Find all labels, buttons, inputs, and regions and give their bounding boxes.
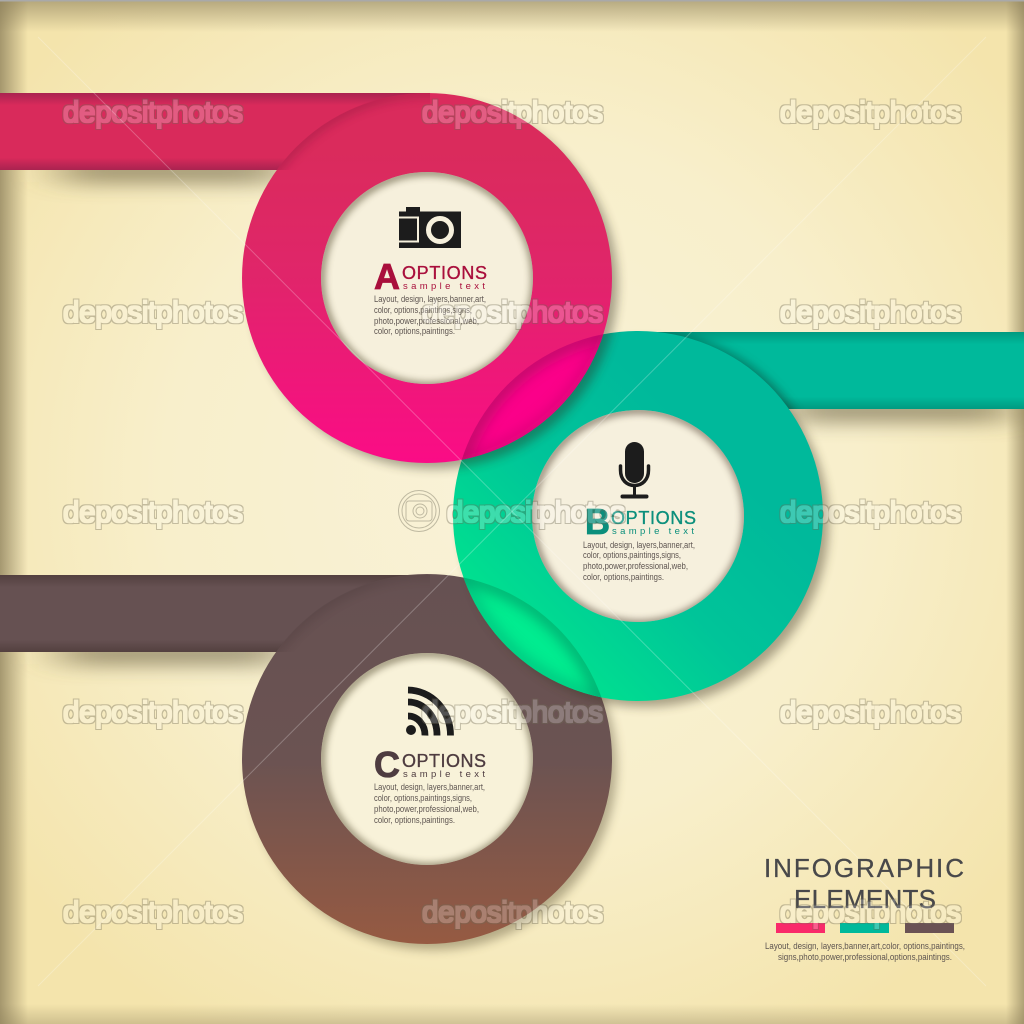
ring edge shading A [277, 93, 430, 170]
icon: watermark camera logo [398, 490, 440, 532]
heading B: sample text [612, 526, 694, 537]
title block [764, 853, 965, 962]
heading C [374, 744, 486, 785]
panel: option C ribbon and ring [0, 574, 617, 950]
panel: option B ribbon and ring [453, 329, 1024, 707]
hole C [321, 653, 535, 867]
ring shadow C [249, 582, 617, 950]
content: option A [374, 207, 487, 336]
title: INFOGRAPHIC [764, 853, 964, 883]
watermarks: depositphotos [780, 896, 961, 929]
watermarks: depositphotos [63, 296, 243, 329]
ribbon shade from ring B [658, 332, 796, 409]
watermarks: depositphotos [780, 96, 961, 129]
hole A [321, 172, 535, 386]
icon: rss signal [406, 690, 451, 736]
band shadows [60, 160, 1010, 664]
body text B [583, 540, 695, 582]
overlap lens: A and B [462, 334, 604, 460]
icon: microphone [620, 442, 648, 498]
body text C: Layout, design, layers,banner,art, [374, 782, 485, 792]
body text C: photo,power,professional,web, [374, 804, 479, 814]
watermarks: depositphotos [422, 296, 603, 329]
ring A [242, 93, 612, 463]
body text A: color, options,paintings. [374, 326, 455, 336]
heading C: C [374, 744, 400, 785]
body text A: photo,power,professional,web, [374, 316, 479, 326]
heading C: sample text [403, 769, 485, 780]
content: option B [583, 442, 696, 582]
body text C: color, options,paintings,signs, [374, 793, 472, 803]
ring edge shading C [276, 576, 403, 652]
caption: Layout, design, layers,banner,art,color, options,paintings, [765, 941, 965, 951]
hole B [532, 410, 746, 624]
heading A [374, 256, 487, 297]
heading B: OPTIONS [611, 508, 696, 528]
heading C: OPTIONS [402, 751, 486, 771]
watermarks [63, 96, 961, 929]
ribbon C [0, 575, 430, 652]
body text C: color, options,paintings. [374, 815, 455, 825]
body text A: Layout, design, layers,banner,art, [374, 294, 486, 304]
ring shadow B [461, 339, 829, 707]
watermarks: depositphotos [422, 96, 603, 129]
caption [765, 941, 965, 962]
heading A: OPTIONS [402, 263, 487, 283]
ribbon B [638, 332, 1024, 409]
ribbon A [0, 93, 430, 170]
watermarks: depositphotos [780, 496, 961, 529]
watermarks: depositphotos [780, 696, 961, 729]
body text B: color, options,paintings. [583, 572, 664, 582]
watermarks: depositphotos [422, 896, 603, 929]
watermarks: depositphotos [780, 296, 961, 329]
overlap lens: B and C [464, 578, 602, 698]
watermarks: depositphotos [63, 696, 243, 729]
title: ELEMENTS [794, 884, 936, 914]
body text C [374, 782, 485, 825]
caption: signs,photo,power,professional,options,paintings. [778, 952, 952, 962]
heading B: B [585, 501, 610, 542]
body text A [374, 294, 486, 336]
watermarks: depositphotos [63, 496, 243, 529]
ring B [453, 331, 823, 701]
watermarks: depositphotos [422, 696, 603, 729]
body text A: color, options,paintings,signs, [374, 305, 472, 315]
panel: option A ribbon and ring [0, 93, 618, 469]
watermarks: depositphotos [63, 896, 243, 929]
body text B: Layout, design, layers,banner,art, [583, 540, 695, 550]
heading A: A [374, 256, 400, 297]
watermarks: depositphotos [63, 96, 243, 129]
heading A: sample text [403, 281, 485, 292]
icon: camera [399, 207, 461, 248]
legend bars [776, 923, 954, 933]
content: option C [374, 690, 486, 825]
body text B: photo,power,professional,web, [583, 561, 688, 571]
body text B: color, options,paintings,signs, [583, 550, 681, 560]
watermarks: depositphotos [447, 496, 625, 529]
title [764, 853, 964, 914]
heading B [585, 501, 696, 542]
ring shadow A [250, 101, 618, 469]
ring C [242, 574, 612, 944]
